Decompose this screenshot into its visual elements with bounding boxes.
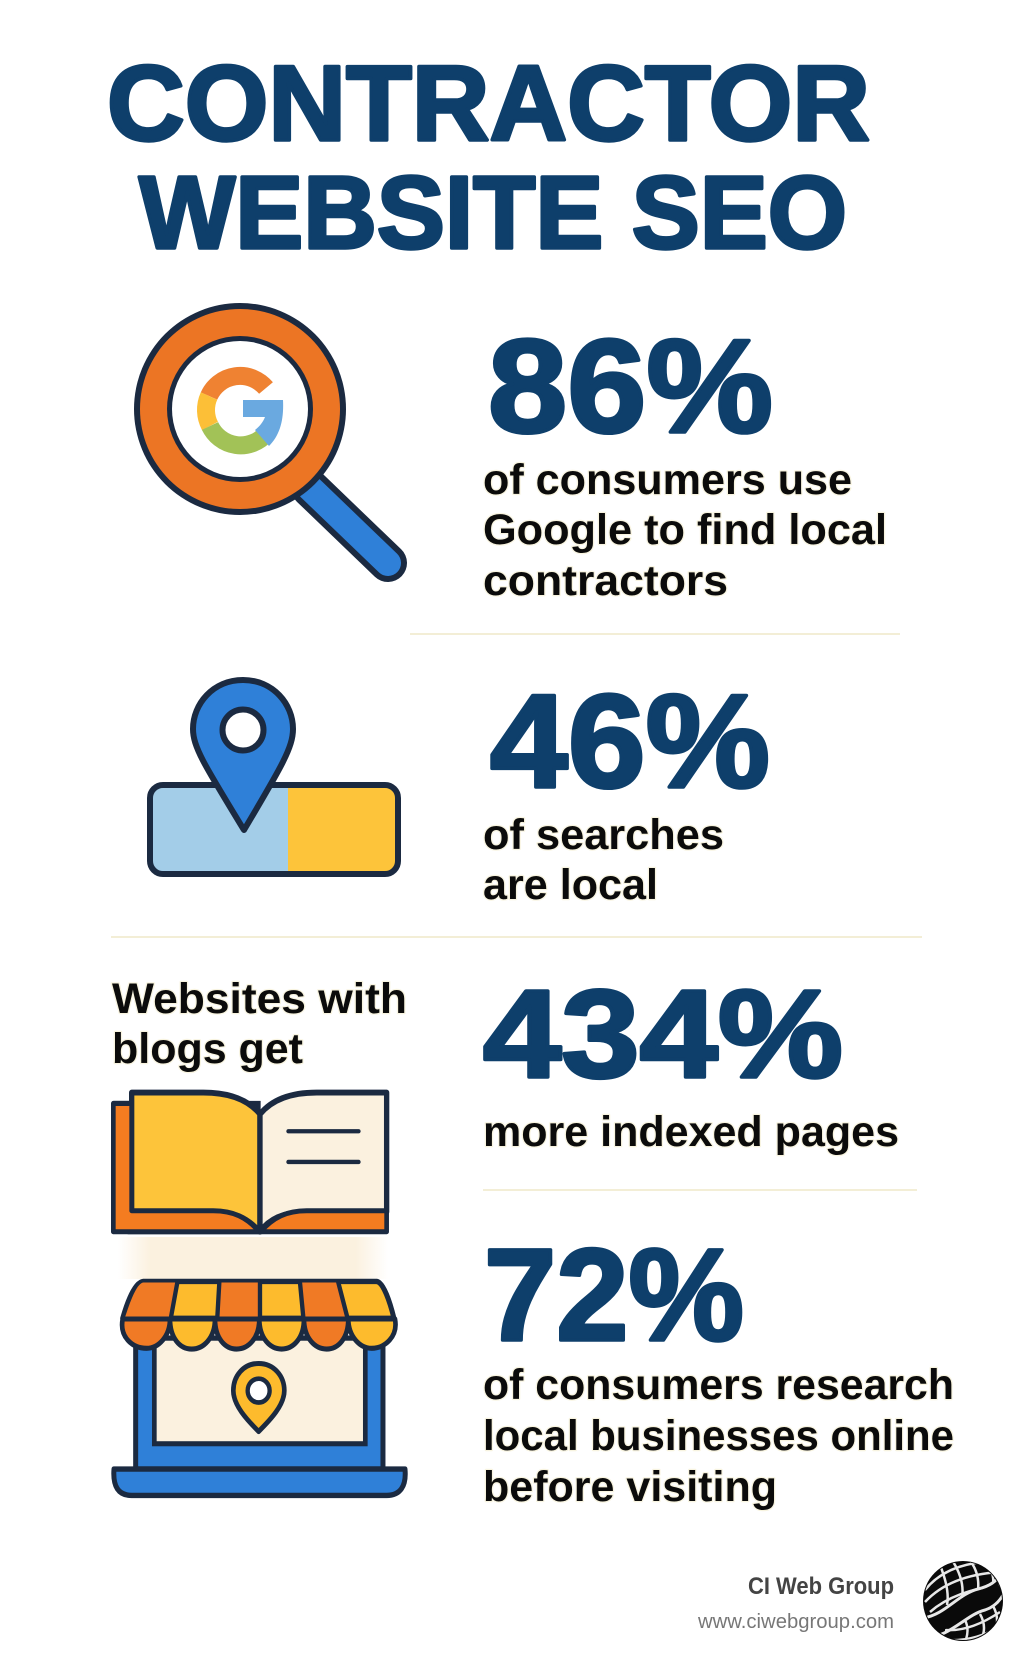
icon: open book (113, 1093, 387, 1232)
stat: 434%: 434% (483, 965, 843, 1104)
glow between book and shop (118, 1237, 388, 1279)
text: of consumers use Google to find local contractors: of consumers use (483, 456, 852, 504)
title (107, 43, 870, 270)
icon: location pin on map bar (150, 680, 398, 874)
text: of searches are local (483, 811, 724, 909)
icon: magnifying glass with Google G (134, 303, 388, 563)
text: Websites with blogs get: blogs get (112, 1025, 303, 1073)
text: of consumers research local businesses online before visiting (483, 1361, 954, 1511)
text: of searches are local: of searches (483, 811, 724, 859)
footer: brand name and URL: www.ciwebgroup.com (697, 1611, 894, 1633)
stat: 46%: 46% (490, 668, 770, 816)
icon: CI Web Group globe logo (923, 1558, 1004, 1642)
title: CONTRACTOR (107, 43, 870, 163)
text: Websites with blogs get: Websites with (112, 975, 407, 1023)
text: Websites with blogs get (112, 975, 407, 1073)
footer: brand name and URL: CI Web Group (748, 1573, 894, 1600)
text: of consumers use Google to find local contractors: contractors (483, 557, 728, 605)
text: more indexed pages: more indexed pages (483, 1108, 899, 1156)
stat: 72%: 72% (484, 1221, 744, 1368)
text: of searches are local: are local (483, 861, 658, 909)
text: of consumers research local businesses online before visiting: before visiting (483, 1463, 777, 1511)
text: of consumers use Google to find local contractors: Google to find local (483, 506, 887, 554)
text: of consumers research local businesses online before visiting: local businesses online (483, 1412, 954, 1460)
text: of consumers use Google to find local contractors (483, 456, 887, 605)
title: WEBSITE SEO (139, 155, 847, 270)
icon: storefront on laptop (114, 1281, 405, 1495)
footer: brand name and URL (697, 1573, 894, 1633)
text: of consumers research local businesses online before visiting: of consumers research (483, 1361, 954, 1409)
stat: 86%: 86% (488, 313, 773, 461)
